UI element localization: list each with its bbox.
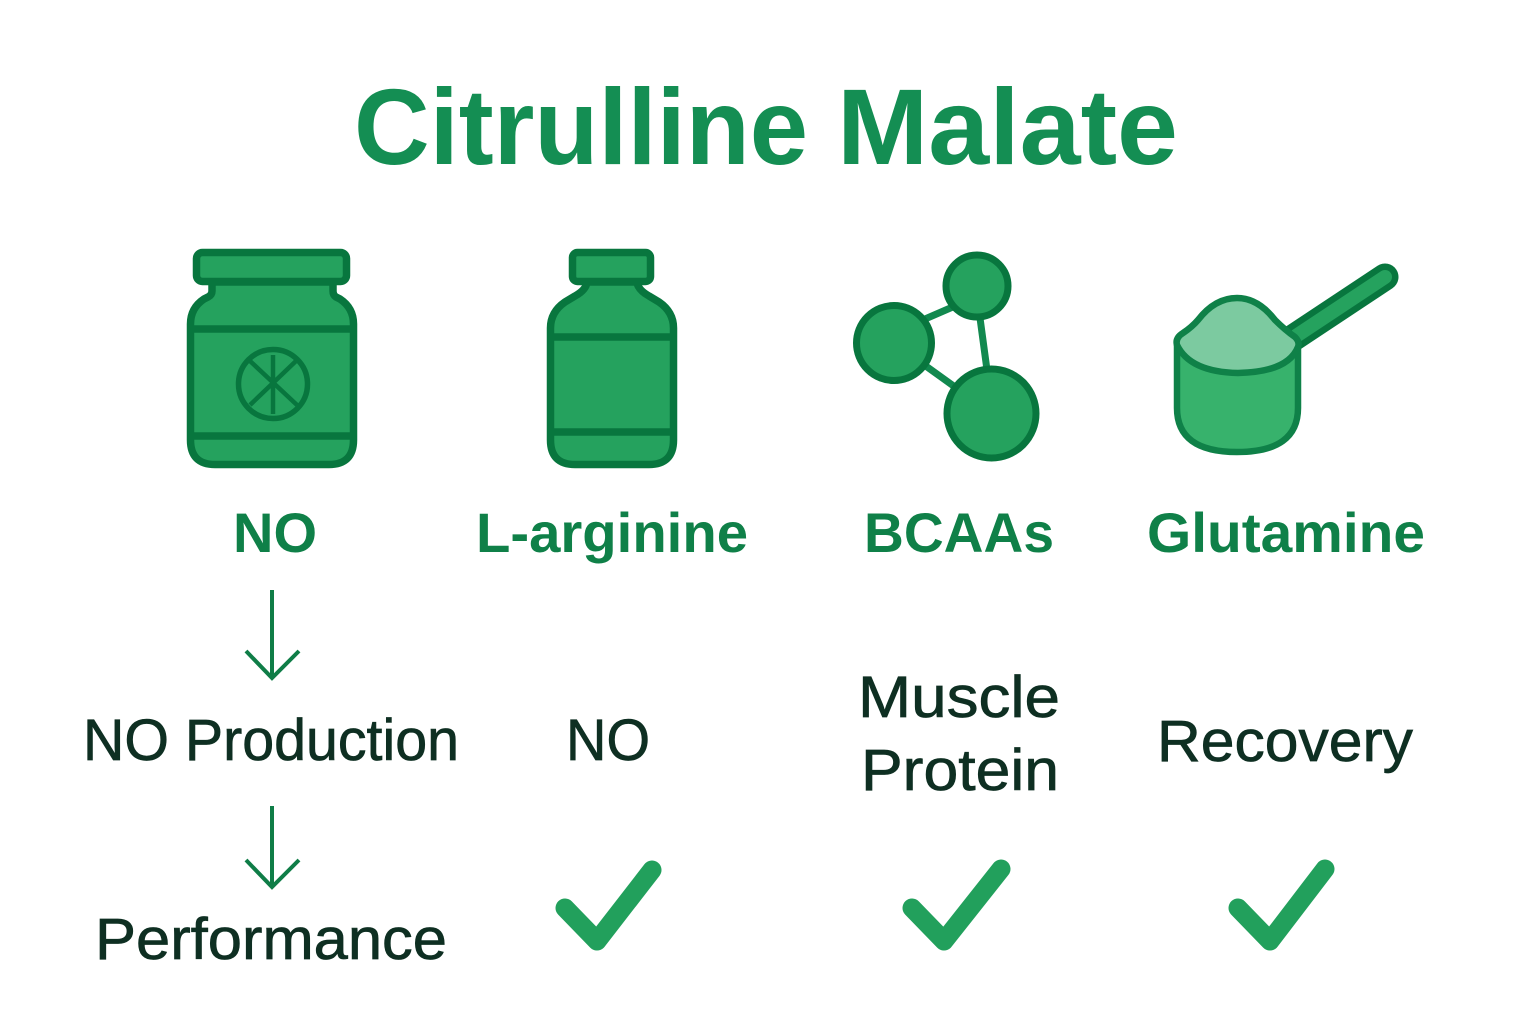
icon: check L-arginine — [565, 870, 652, 941]
icon: check BCAAs — [912, 869, 1001, 941]
text: NO: NO — [566, 708, 650, 773]
heading: NO: NO — [233, 501, 317, 564]
text: Muscle Protein: Muscle — [858, 665, 1060, 730]
text: Performance: Performance — [95, 907, 447, 972]
icon: check Glutamine — [1238, 869, 1325, 941]
arrow: NO Production to Performance — [246, 806, 299, 887]
title: Malate — [837, 66, 1178, 187]
text: Muscle Protein — [858, 665, 1060, 803]
icon: bottle — [550, 252, 674, 464]
title — [354, 66, 1178, 187]
icon: molecule — [856, 255, 1036, 458]
text: Muscle Protein: Protein — [861, 738, 1059, 803]
heading: BCAAs: BCAAs — [864, 501, 1054, 564]
icon: jar — [190, 252, 354, 464]
heading: Glutamine: Glutamine — [1147, 501, 1425, 564]
text: NO Production: NO Production — [83, 708, 459, 773]
title: Citrulline — [354, 66, 808, 187]
heading: L-arginine: L-arginine — [476, 501, 748, 564]
arrow: NO to NO Production — [246, 590, 299, 678]
text: Recovery: Recovery — [1157, 709, 1413, 774]
icon: scoop — [1177, 277, 1385, 452]
